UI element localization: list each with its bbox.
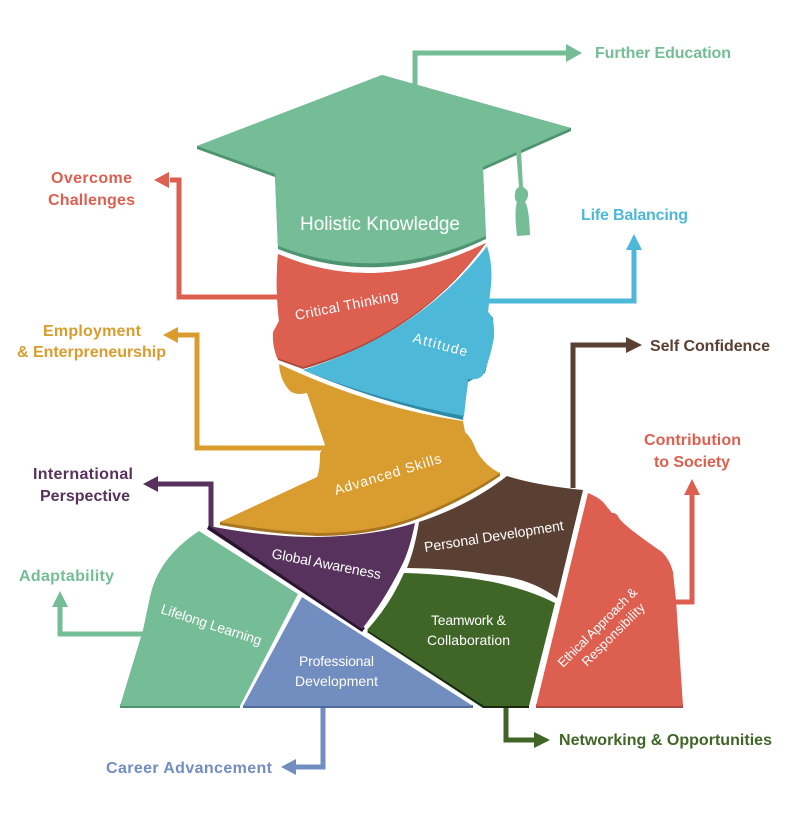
arrow: career advancement [281,708,323,775]
shoulder: global awareness [207,523,415,632]
shoulder: ethical approach [536,493,683,708]
label: international perspective [33,466,133,505]
personal development label: Personal Development [423,517,565,555]
label: employment [17,323,166,361]
arrow: adaptability [52,591,144,634]
global awareness label: Global Awareness [270,545,382,582]
label: life balancing: Life Balancing [581,207,688,224]
label: overcome challenges: Overcome [51,170,132,187]
attitude label: Attitude [411,329,470,359]
chest: professional development [243,597,473,708]
label: contribution to society [644,432,741,471]
label: international perspective: International [33,466,133,483]
professional development label [295,653,378,689]
label: further education: Further Education [595,45,731,62]
arrow: overcome challenges [154,172,277,297]
ethical approach label: Ethical Approach & [555,584,640,670]
lifelong learning label: Lifelong Learning [159,601,264,648]
teamwork label: Collaboration [427,632,510,648]
arrow: life balancing [489,234,642,301]
head: attitude [303,246,494,420]
arrow: contribution to society [675,479,700,602]
label: contribution to society: to Society [654,454,730,471]
head: critical thinking [273,243,486,369]
label: adaptability: Adaptability [19,568,114,585]
arrow: employment [163,327,326,448]
label: employment: & Enterpreneurship [17,344,166,361]
label: employment: Employment [43,323,142,340]
arrow: international perspective [143,476,211,528]
professional development label: Professional [299,653,374,669]
ethical approach label: Responsibility [579,599,648,669]
label: career advancement: Career Advancement [106,760,273,777]
graduation cap: holistic knowledge [197,75,571,267]
critical thinking label: Critical Thinking [294,287,400,323]
label: international perspective: Perspective [40,488,130,505]
cap label: Holistic Knowledge [300,214,460,235]
teamwork label [427,612,510,648]
label: overcome challenges: Challenges [48,192,135,209]
label: networking and opportunities: Networking & Opportunities [559,732,772,749]
label: overcome challenges [48,170,135,209]
shoulder: personal development [407,476,583,598]
arrow: self confidence [573,337,642,488]
arrow: further education [415,44,582,85]
professional development label: Development [295,673,378,689]
shoulder: lifelong learning [120,531,298,708]
cap tassel [515,150,530,236]
neck and collar: advanced skills [220,364,500,536]
label: contribution to society: Contribution [644,432,741,449]
label: self confidence: Self Confidence [650,338,770,355]
arrow: networking [506,707,550,748]
chest: teamwork and collaboration [367,573,555,708]
advanced skills label: Advanced Skills [332,450,443,498]
teamwork label: Teamwork & [431,612,507,628]
